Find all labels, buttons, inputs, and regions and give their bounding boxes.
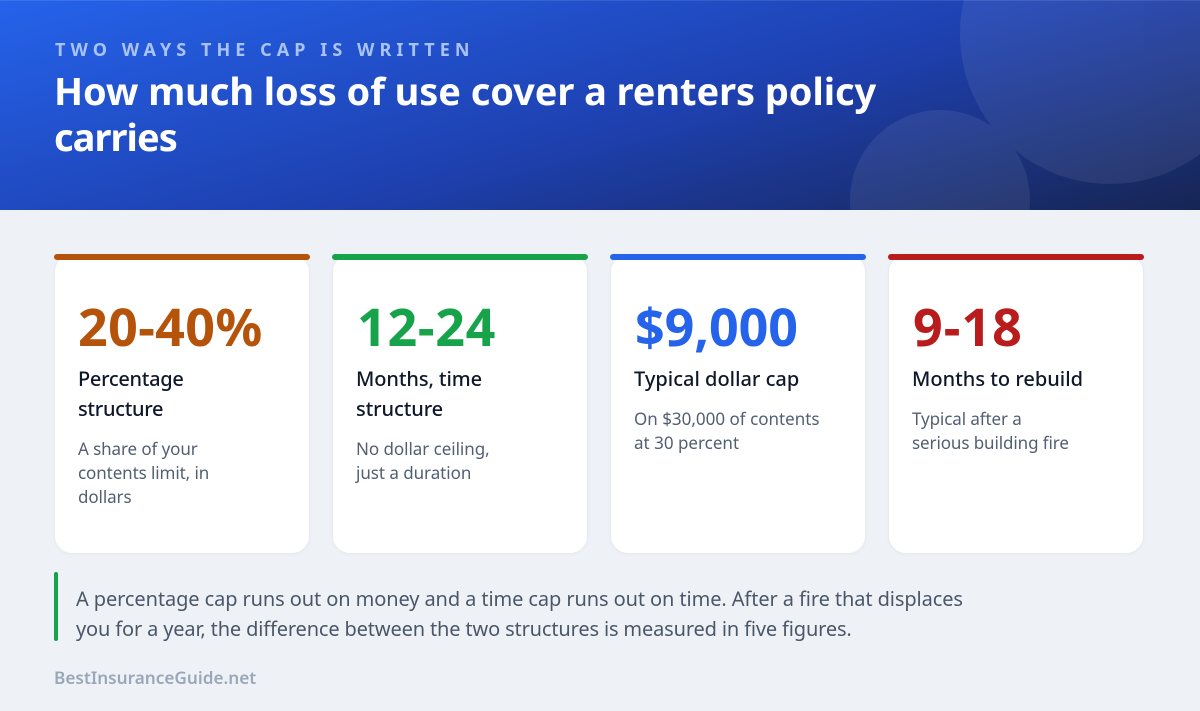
label: Typical dollar cap [634,365,799,392]
description: dollars [78,485,132,508]
stat: 9-18 [913,291,1023,362]
description [355,437,490,484]
card: dollar cap [610,254,866,554]
callout text: A percentage cap runs out on money and a time cap runs out on time. After a fire that displaces [76,585,963,612]
label: Percentage [78,365,184,392]
card: percentage structure [54,254,310,554]
source footer: BestInsuranceGuide.net [54,667,256,690]
description: A share of your [78,437,198,460]
description [634,407,820,454]
callout text [76,585,963,642]
description: just a duration [356,461,471,484]
description [78,437,209,508]
header banner [0,0,1200,210]
callout text: you for a year, the difference between the two structures is measured in five figures. [76,615,852,642]
description: Typical after a [912,407,1022,430]
label: Months, time [356,365,482,392]
label [356,365,482,422]
accent bar [54,254,310,260]
title [54,65,876,163]
stat: 12-24 [357,291,496,362]
decorative circles [850,0,1200,210]
title: How much loss of use cover a renters policy [54,65,876,117]
label: structure [356,395,443,422]
description: No dollar ceiling, [356,437,490,460]
callout accent bar [54,572,58,641]
description: at 30 percent [634,431,739,454]
accent bar [610,254,866,260]
kicker: TWO WAYS THE CAP IS WRITTEN [55,38,475,62]
description: On $30,000 of contents [634,407,820,430]
accent bar [888,254,1144,260]
accent bar [332,254,588,260]
label: structure [78,395,163,422]
label: Months to rebuild [912,365,1083,392]
title: carries [54,111,177,163]
description: serious building fire [912,431,1069,454]
description: contents limit, in [78,461,209,484]
stat: 20-40% [78,291,263,362]
stat: $9,000 [635,291,798,362]
card: time structure [332,254,588,554]
card: months to rebuild [888,254,1144,554]
description [912,407,1069,454]
label [78,365,184,422]
